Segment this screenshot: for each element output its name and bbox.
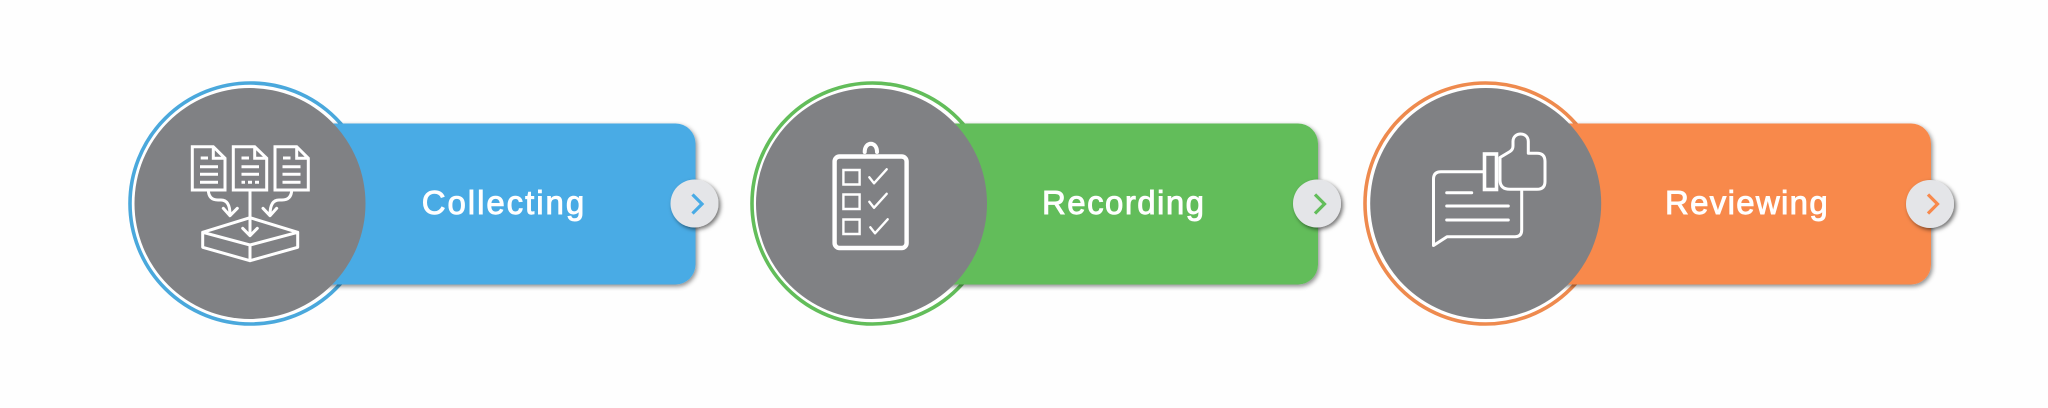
blue label bar (300, 124, 696, 284)
label: Reviewing: Reviewing (1665, 184, 1828, 221)
gray icon circle: collecting (134, 88, 366, 319)
outer ring: reviewing (1365, 83, 1606, 324)
panel: recording (752, 83, 1341, 324)
arrow button: reviewing (1906, 180, 1954, 228)
label: Recording: Recording (1042, 184, 1204, 221)
icon: clipboard checklist (835, 144, 907, 248)
gray icon circle: recording (756, 88, 987, 319)
orange label bar (1535, 124, 1931, 284)
icon: documents into box (192, 147, 308, 261)
outer ring: collecting (130, 83, 371, 324)
arrow button: recording (1293, 180, 1341, 228)
arrow button: collecting (670, 180, 718, 228)
panel: reviewing (1365, 83, 1954, 324)
panel: collecting (130, 83, 718, 324)
label: Collecting: Collecting (422, 184, 584, 221)
green label bar (920, 124, 1318, 284)
gray icon circle: reviewing (1370, 88, 1601, 319)
outer ring: recording (752, 83, 993, 324)
icon: speech bubble with thumbs up (1434, 134, 1545, 246)
